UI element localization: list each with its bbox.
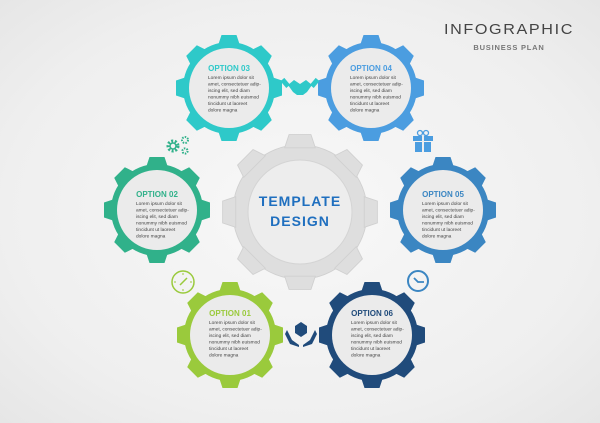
title: [444, 21, 574, 52]
icon: box in hands: [285, 322, 317, 347]
gear: option 05: [390, 157, 496, 263]
gear: option 02: OPTION 02: [136, 190, 178, 199]
icon: gears: [168, 137, 188, 154]
gear: option 02: [104, 157, 210, 263]
center gear: DESIGN: [270, 213, 330, 229]
icon: compass clock: [172, 271, 194, 293]
gear: option 03: OPTION 03: [208, 64, 250, 73]
gear: option 05: OPTION 05: [422, 190, 464, 199]
gear: option 04: [318, 35, 424, 141]
icon: gift: [413, 130, 433, 152]
center gear: TEMPLATE: [259, 193, 341, 209]
title: INFOGRAPHIC: [444, 21, 574, 38]
gear: option 06: OPTION 06: [351, 309, 393, 318]
icon: clock: [408, 271, 428, 291]
gear: option 04: OPTION 04: [350, 64, 392, 73]
icon: handshake: [280, 78, 320, 95]
gear: option 03: [176, 35, 282, 141]
gear: option 01: [177, 282, 283, 388]
title: BUSINESS PLAN: [473, 43, 545, 52]
center gear: [223, 135, 377, 289]
gear: option 06: [319, 282, 425, 388]
gear: option 01: OPTION 01: [209, 309, 251, 318]
